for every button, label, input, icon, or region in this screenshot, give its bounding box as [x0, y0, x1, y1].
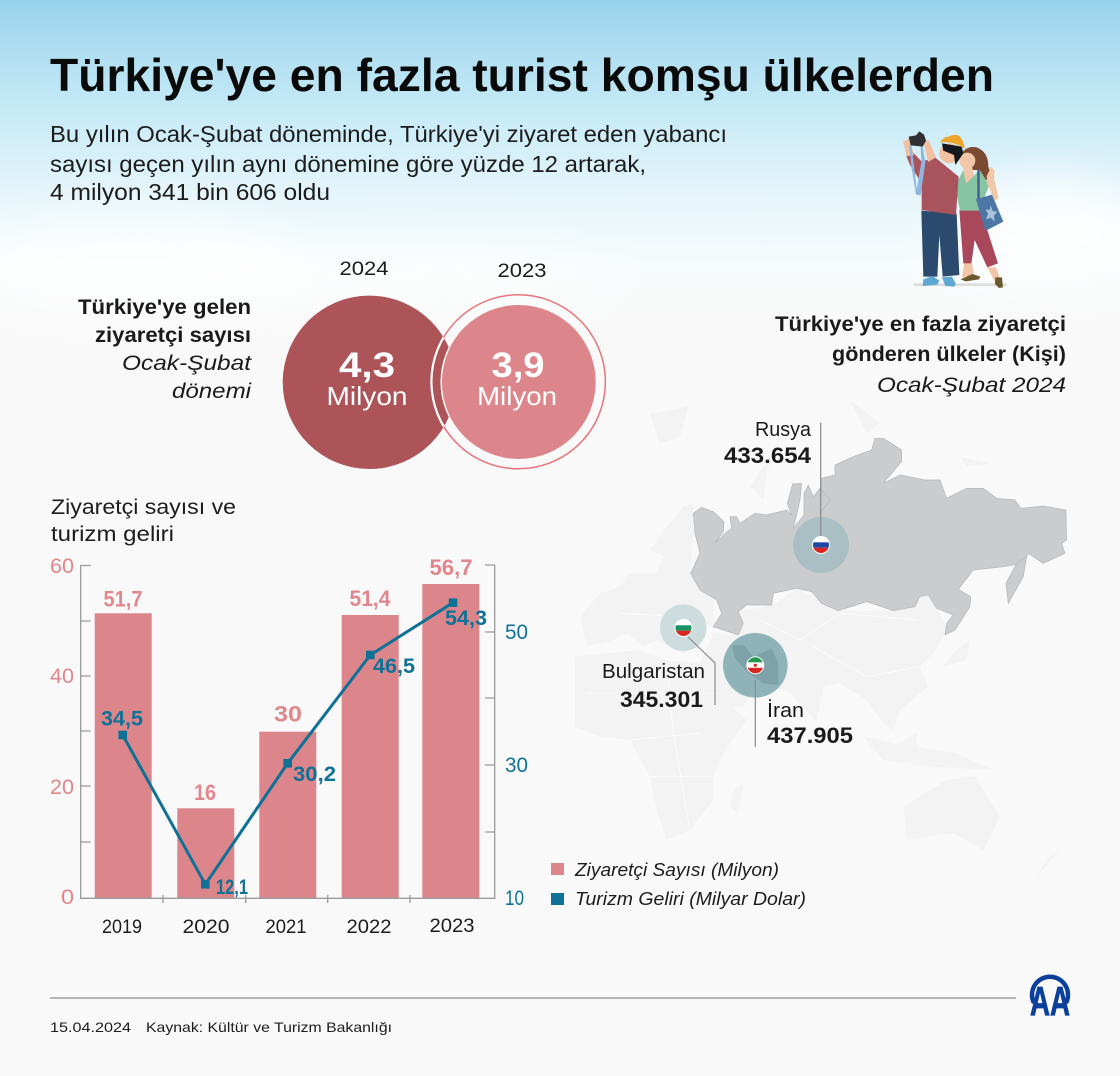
footer: Kaynak: Kültür ve Turizm Bakanlığı — [146, 1019, 392, 1035]
left axis labels — [50, 555, 74, 909]
year labels: 2023 — [430, 916, 474, 937]
intro text: Bu yılın Ocak-Şubat döneminde, Türkiye'yi ziyaret eden yabancı — [50, 121, 727, 147]
marker: Bulgaria: 345.301 — [620, 687, 703, 712]
year labels: 2021 — [266, 917, 306, 938]
marker: Iran: 437.905 — [767, 723, 853, 748]
label: visitor count: Ocak-Şubat — [122, 352, 252, 375]
left axis labels: 40 — [50, 665, 74, 688]
comparison circles: 3,9 — [492, 346, 544, 385]
comparison circles: 4,3 — [339, 346, 395, 385]
line value labels: 34,5 — [101, 708, 143, 730]
bar value labels: 56,7 — [430, 555, 472, 580]
comparison circles: 2023 — [498, 261, 546, 282]
marker: Iran: İran — [767, 699, 804, 722]
right axis labels: 10 — [505, 887, 524, 910]
right axis labels: 30 — [505, 754, 528, 777]
line value labels: 46,5 — [373, 655, 415, 678]
axes — [81, 565, 495, 903]
comparison circles — [283, 259, 605, 469]
bar value labels: 30 — [274, 702, 302, 726]
logo: AA: AA — [1030, 978, 1070, 1024]
marker: Russia — [724, 419, 849, 573]
revenue line — [118, 598, 457, 889]
man head, hat — [939, 143, 959, 163]
right axis labels — [505, 621, 528, 910]
bar value labels: 51,4 — [350, 586, 391, 611]
comparison circles: Milyon — [326, 381, 408, 411]
legend — [551, 860, 806, 909]
label: visitor count — [78, 296, 253, 403]
world map — [575, 400, 1067, 877]
comparison circles: Milyon — [477, 381, 557, 411]
left axis labels: 0 — [61, 886, 74, 909]
bar value labels: 51,7 — [104, 586, 142, 612]
man shirt — [906, 153, 959, 215]
chart heading: Ziyaretçi sayısı ve — [51, 496, 236, 519]
marker: Iran — [723, 633, 853, 748]
right axis labels: 50 — [505, 621, 528, 644]
year labels: 2020 — [182, 917, 230, 938]
year labels: 2022 — [346, 917, 392, 938]
illustration: tourist couple — [903, 131, 1007, 288]
label: visitor count: Türkiye'ye gelen — [78, 296, 251, 319]
left axis labels: 20 — [50, 776, 74, 799]
footer — [50, 998, 1016, 1035]
line value labels: 54,3 — [445, 607, 487, 630]
woman hair — [960, 147, 993, 180]
comparison circles: 2024 — [340, 259, 389, 280]
left axis labels: 60 — [50, 555, 74, 578]
marker: Russia: 433.654 — [724, 443, 812, 468]
chart heading: turizm geliri — [51, 523, 174, 546]
title: Türkiye'ye en fazla turist komşu ülkelerden — [50, 49, 994, 101]
marker: Bulgaria: Bulgaristan — [602, 661, 705, 683]
intro text: sayısı geçen yılın aynı dönemine göre yüzde 12 artarak, — [50, 151, 646, 177]
bars — [95, 584, 479, 898]
label: visitor count: dönemi — [172, 380, 253, 403]
Russia — [691, 438, 1067, 635]
legend: Turizm Geliri (Milyar Dolar) — [575, 889, 806, 909]
camera strap — [909, 145, 925, 195]
year labels — [102, 916, 474, 938]
bar value labels — [104, 555, 472, 805]
label: visitor count: ziyaretçi sayısı — [95, 324, 251, 347]
map heading: Ocak-Şubat 2024 — [877, 374, 1066, 397]
map heading: gönderen ülkeler (Kişi) — [832, 343, 1066, 366]
year labels: 2019 — [102, 917, 142, 938]
intro text — [50, 121, 727, 205]
line value labels: 30,2 — [293, 763, 336, 786]
intro text: 4 milyon 341 bin 606 oldu — [50, 179, 330, 205]
legend: Ziyaretçi Sayısı (Milyon) — [574, 860, 779, 880]
map heading: Türkiye'ye en fazla ziyaretçi — [775, 313, 1066, 336]
chart heading — [51, 496, 236, 546]
map heading — [775, 313, 1066, 397]
combo chart — [50, 555, 528, 938]
marker: Russia: Rusya — [755, 419, 812, 441]
marker: Bulgaria — [602, 604, 715, 712]
footer: 15.04.2024 — [50, 1019, 131, 1035]
bar value labels: 16 — [194, 780, 216, 805]
man jeans — [921, 211, 959, 277]
woman pants and legs — [959, 207, 998, 267]
line value labels: 12,1 — [216, 876, 248, 899]
logo: AA — [1030, 977, 1070, 1024]
line value labels — [101, 607, 487, 899]
